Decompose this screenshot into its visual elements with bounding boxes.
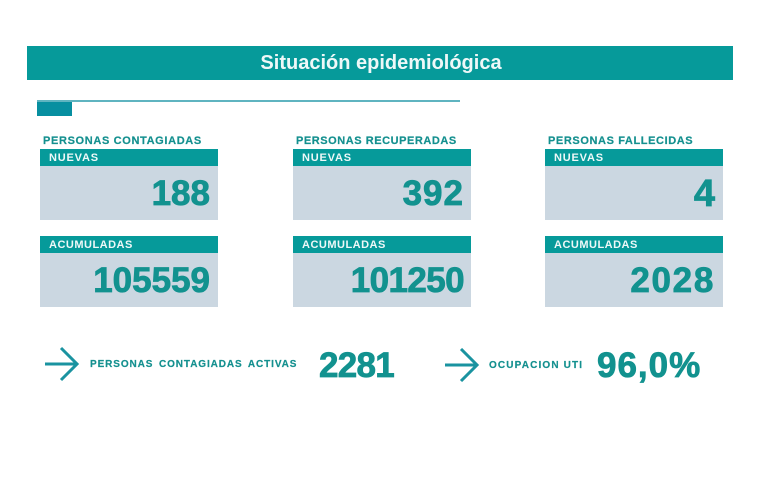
card value — [40, 253, 218, 307]
heading: personas fallecidas: PERSONAS FALLECIDAS — [548, 135, 693, 147]
value: ocupacion UTI: 96,0% — [597, 346, 701, 385]
card value: 188 — [152, 174, 210, 213]
card label — [545, 149, 723, 166]
card value — [545, 166, 723, 220]
icon: arrow activas — [45, 347, 79, 381]
card value — [293, 166, 471, 220]
card label: NUEVAS — [49, 152, 99, 164]
card label: ACUMULADAS — [554, 239, 638, 251]
heading: personas recuperadas: PERSONAS RECUPERADAS — [296, 135, 457, 147]
title: Situación epidemiológica — [260, 52, 502, 74]
card value: 392 — [403, 174, 464, 213]
icon: arrow UTI — [445, 348, 479, 382]
card label: ACUMULADAS — [302, 239, 386, 251]
card value — [545, 253, 723, 307]
card value: 2028 — [630, 261, 715, 300]
card: fallecidas nuevas — [545, 149, 723, 220]
card label — [40, 236, 218, 253]
card value — [293, 253, 471, 307]
divider line — [37, 100, 460, 102]
card: recuperadas nuevas — [293, 149, 471, 220]
card label: NUEVAS — [302, 152, 352, 164]
label: ocupacion UTI: OCUPACION UTI — [489, 360, 583, 371]
card value: 4 — [694, 173, 715, 215]
label: personas contagiadas activas: PERSONAS CONTAGIADAS ACTIVAS — [90, 359, 297, 370]
card label — [40, 149, 218, 166]
card label — [293, 149, 471, 166]
card label — [545, 236, 723, 253]
card value: 105559 — [93, 261, 210, 300]
card: contagiadas nuevas — [40, 149, 218, 220]
value: activas: 2281 — [319, 346, 394, 385]
card label: ACUMULADAS — [49, 239, 133, 251]
card: contagiadas acumuladas — [40, 236, 218, 307]
card label — [293, 236, 471, 253]
card: recuperadas acumuladas — [293, 236, 471, 307]
card: fallecidas acumuladas — [545, 236, 723, 307]
card label: NUEVAS — [554, 152, 604, 164]
card value — [40, 166, 218, 220]
card value: 101250 — [351, 261, 464, 300]
divider accent block — [37, 101, 72, 116]
title — [27, 46, 733, 80]
heading: personas contagiadas: PERSONAS CONTAGIADAS — [43, 135, 202, 147]
